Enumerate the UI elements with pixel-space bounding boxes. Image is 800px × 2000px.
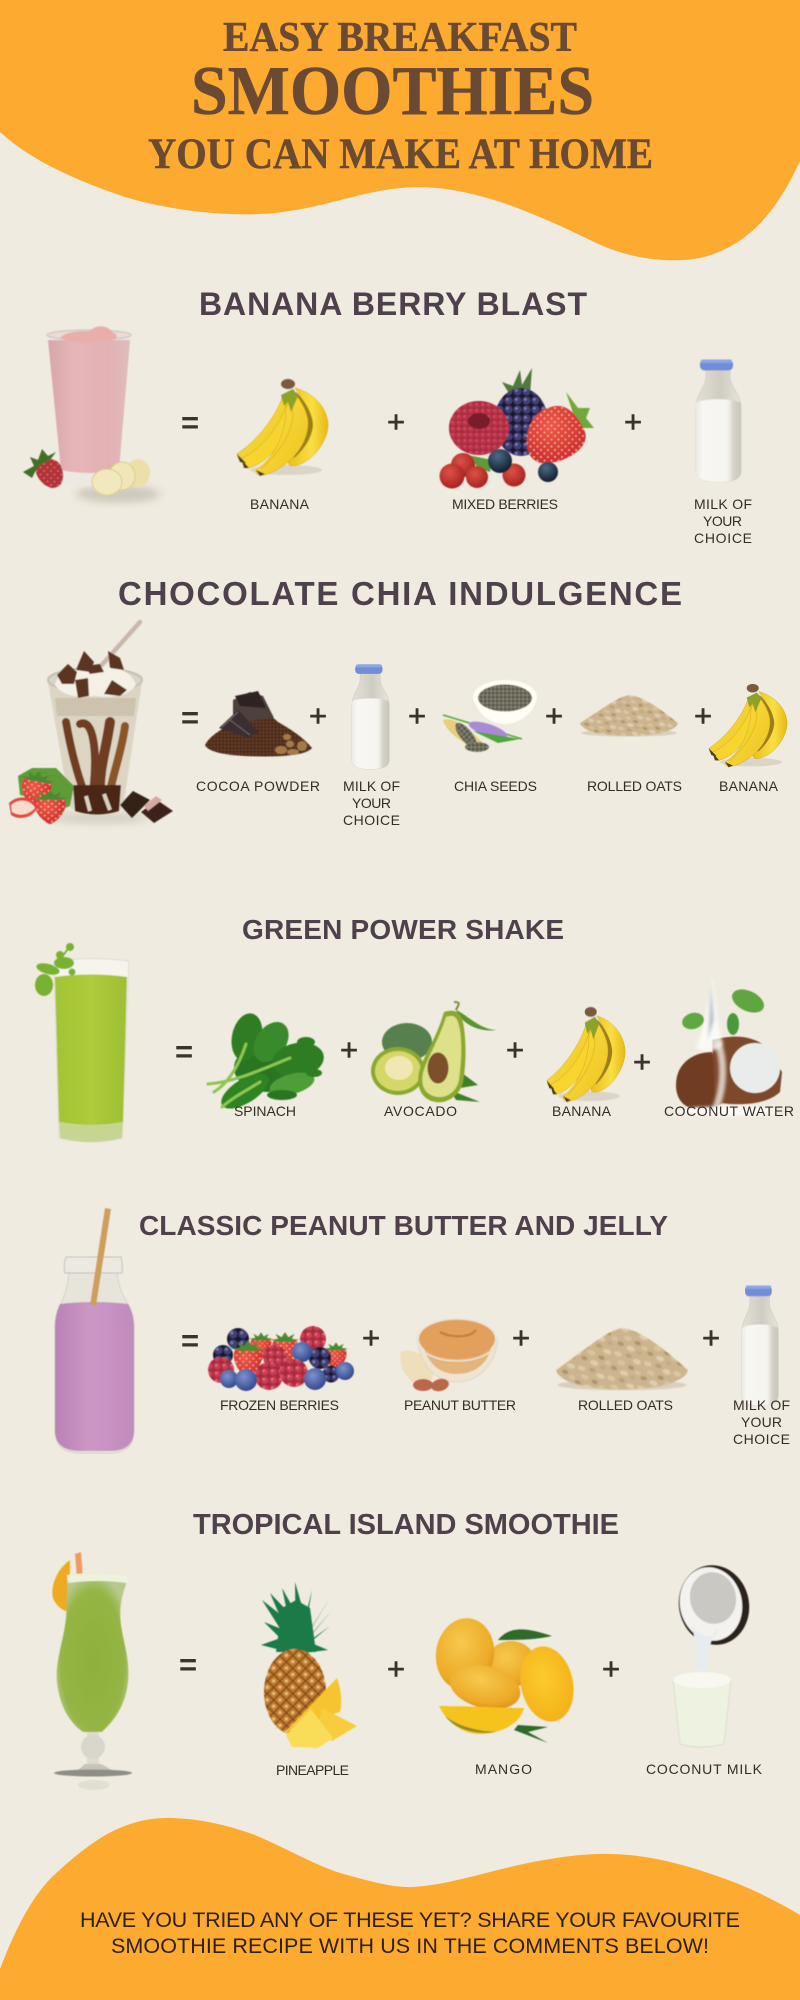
- label: milk of your choice: CHOICE: [343, 812, 400, 828]
- icon: banana: [547, 1007, 625, 1102]
- header panel: [0, 0, 800, 260]
- plus sign: +: [512, 1320, 530, 1355]
- panel: green power shake: [35, 914, 794, 1142]
- panel: banana berry blast: [23, 286, 752, 546]
- icon: rolled oats: [556, 1328, 688, 1390]
- icon: banana: [709, 684, 787, 767]
- call to action text: SMOOTHIE RECIPE WITH US IN THE COMMENTS BELOW!: [111, 1934, 709, 1958]
- label: banana: BANANA: [250, 496, 310, 512]
- icon: tropical hurricane glass: [52, 1552, 132, 1790]
- footer panel: [0, 1818, 800, 2000]
- label: cocoa powder: COCOA POWDER: [196, 778, 320, 794]
- label: coconut milk: COCONUT MILK: [646, 1761, 763, 1777]
- icon: cocoa powder: [205, 691, 312, 756]
- label: frozen berries: FROZEN BERRIES: [220, 1397, 339, 1413]
- equals sign: =: [181, 405, 199, 440]
- heading: TROPICAL ISLAND SMOOTHIE: [193, 1509, 619, 1541]
- heading: CHOCOLATE CHIA INDULGENCE: [118, 575, 682, 612]
- equals sign: =: [181, 1323, 199, 1358]
- label: banana: BANANA: [552, 1103, 612, 1119]
- heading: GREEN POWER SHAKE: [242, 914, 564, 945]
- label: banana: BANANA: [719, 778, 779, 794]
- icon: mixed berries: [440, 368, 594, 488]
- panel: chocolate chia indulgence: [9, 575, 787, 828]
- icon: mango: [431, 1614, 580, 1743]
- label: milk of your choice: [733, 1397, 790, 1447]
- label: milk of your choice: YOUR: [352, 795, 391, 811]
- label: spinach: SPINACH: [234, 1103, 296, 1119]
- title line: easy breakfast: EASY BREAKFAST: [223, 15, 577, 61]
- label: milk of your choice: MILK OF: [733, 1397, 790, 1413]
- plus sign: +: [362, 1320, 380, 1355]
- plus sign: +: [506, 1032, 524, 1067]
- label: milk of your choice: [343, 778, 400, 828]
- plus sign: +: [602, 1651, 620, 1686]
- plus sign: +: [545, 698, 563, 733]
- equals sign: =: [179, 1647, 197, 1682]
- label: mango: MANGO: [475, 1761, 532, 1777]
- label: milk of your choice: MILK OF: [694, 496, 752, 512]
- label: milk of your choice: CHOICE: [733, 1431, 790, 1447]
- label: milk of your choice: YOUR: [703, 513, 742, 529]
- icon: chia seeds: [443, 680, 537, 752]
- icon: chocolate smoothie cup: [9, 622, 173, 824]
- icon: peanut butter: [400, 1319, 498, 1393]
- icon: coconut water splash: [676, 978, 782, 1116]
- icon: rolled oats: [580, 695, 678, 736]
- label: rolled oats: ROLLED OATS: [587, 778, 682, 794]
- panel: classic peanut butter and jelly: [55, 1208, 790, 1453]
- plus sign: +: [387, 1651, 405, 1686]
- label: rolled oats: ROLLED OATS: [578, 1397, 673, 1413]
- footer orange wave: [0, 1818, 800, 2000]
- label: avocado: AVOCADO: [384, 1103, 457, 1119]
- plus sign: +: [340, 1032, 358, 1067]
- heading: BANANA BERRY BLAST: [199, 286, 587, 322]
- plus sign: +: [633, 1044, 651, 1079]
- plus sign: +: [309, 698, 327, 733]
- label: mixed berries: MIXED BERRIES: [452, 496, 558, 512]
- heading: CLASSIC PEANUT BUTTER AND JELLY: [139, 1210, 668, 1241]
- icon: milk bottle: [696, 360, 741, 482]
- icon: banana: [237, 379, 328, 476]
- icon: purple smoothie bottle: [55, 1208, 134, 1453]
- plus sign: +: [387, 404, 405, 439]
- plus sign: +: [702, 1320, 720, 1355]
- label: milk of your choice: [694, 496, 752, 546]
- icon: milk bottle: [352, 664, 389, 769]
- label: chia seeds: CHIA SEEDS: [454, 778, 537, 794]
- equals sign: =: [175, 1034, 193, 1069]
- title line: smoothies: SMOOTHIES: [191, 53, 594, 130]
- icon: green smoothie glass: [35, 943, 129, 1142]
- icon: milk bottle: [742, 1285, 778, 1406]
- icon: frozen berries: [208, 1326, 354, 1391]
- equals sign: =: [181, 700, 199, 735]
- call to action text: HAVE YOU TRIED ANY OF THESE YET? SHARE YOUR FAVOURITE: [80, 1908, 740, 1932]
- icon: pineapple: [261, 1582, 357, 1748]
- plus sign: +: [624, 404, 642, 439]
- title line: you can make at home: YOU CAN MAKE AT HOME: [148, 131, 653, 178]
- panel: tropical island smoothie: [52, 1509, 763, 1790]
- header orange wave: [0, 0, 800, 260]
- label: milk of your choice: YOUR: [741, 1414, 782, 1430]
- icon: spinach: [208, 1010, 327, 1115]
- label: pineapple: PINEAPPLE: [276, 1762, 349, 1778]
- label: peanut butter: PEANUT BUTTER: [404, 1397, 516, 1413]
- plus sign: +: [694, 698, 712, 733]
- call to action text: [80, 1908, 740, 1958]
- label: milk of your choice: MILK OF: [343, 778, 400, 794]
- label: milk of your choice: CHOICE: [694, 530, 752, 546]
- label: coconut water: COCONUT WATER: [664, 1103, 794, 1119]
- icon: coconut milk: [671, 1559, 757, 1747]
- plus sign: +: [408, 698, 426, 733]
- icon: avocado: [371, 1002, 497, 1102]
- icon: pink smoothie glass: [23, 326, 160, 503]
